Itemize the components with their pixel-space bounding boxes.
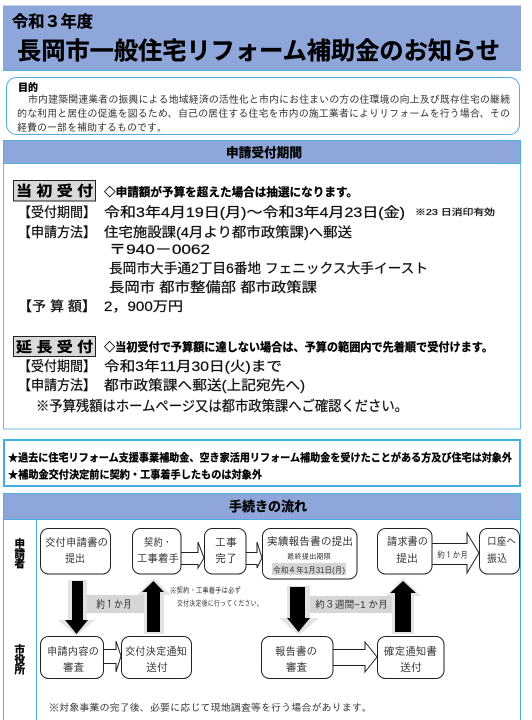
extended acceptance block: 【受付期間】 <box>18 359 96 374</box>
note: contract timing: ※契約・工事着手は必ず <box>170 586 241 595</box>
box: construction complete: 工事 <box>215 537 237 549</box>
extended acceptance block: ※予算残額はホームページ又は都市政策課へご確認ください。 <box>36 398 408 414</box>
initial acceptance block: ◇申請額が予算を超えた場合は抽選になります。 <box>104 185 358 199</box>
arrow: up to contract <box>137 578 171 634</box>
box: report review: 報告書の <box>275 646 317 658</box>
arrow: invoice to transfer <box>432 533 479 573</box>
initial acceptance block: 【申請方法】 <box>18 225 96 240</box>
extended acceptance label <box>14 336 96 356</box>
box: construction complete <box>204 528 246 574</box>
box: contract and construction start: 工事着手 <box>137 552 179 565</box>
box: performance report submission <box>262 528 357 579</box>
purpose body text: 市内建築関連業者の振興による地域経済の活性化と市内にお住まいの方の住環境の向上及び既存住宅の継続 <box>28 93 510 106</box>
row label: city hall: 役 <box>14 653 26 666</box>
arrow: report review to final notice <box>333 642 377 672</box>
extended acceptance block: ◇当初受付で予算額に達しない場合は、予算の範囲内で先着順で受付けます。 <box>104 340 493 354</box>
row label: applicant: 者 <box>14 557 25 570</box>
box: application review: 審査 <box>63 662 84 674</box>
duration label: about one month <box>87 595 144 613</box>
title banner <box>3 6 521 70</box>
panel: eligibility notice: ★過去に住宅リフォーム支援事業補助金、空き家活用リフォーム補助金を受けたことがある方及び住宅は対象外 <box>8 451 512 464</box>
initial acceptance label: 当 初 受 付 <box>16 183 93 199</box>
box: bank transfer: 口座へ <box>487 536 516 548</box>
initial acceptance block: 令和3年4月19日(月)～令和3年4月23日(金) <box>104 205 405 220</box>
application period heading band <box>4 140 520 164</box>
panel: procedure flow <box>4 494 520 720</box>
row label: applicant: 申 <box>14 537 25 550</box>
box: performance report submission: 最終提出期限 <box>287 552 331 561</box>
arrow: down, about one month <box>58 580 95 636</box>
box: contract and construction start: 契約・ <box>144 537 172 549</box>
initial acceptance block: 【受付期間】 <box>18 205 96 220</box>
box: final notice <box>378 636 444 678</box>
box: grant application submission <box>40 528 110 574</box>
purpose body text: 的な利用と居住の促進を図るため、自己の居住する住宅を市内の施工業者によりリフォームを行う場合、その <box>17 107 510 120</box>
main title: 長岡市一般住宅リフォーム補助金のお知らせ <box>17 38 500 65</box>
initial acceptance block: ※23 日消印有効 <box>415 207 495 217</box>
row label: applicant <box>14 537 26 570</box>
application period heading band: 申請受付期間 <box>226 145 302 160</box>
box: contract and construction start <box>132 528 181 574</box>
row label: city hall: 市 <box>14 643 26 656</box>
box: construction complete: 完了 <box>215 553 237 565</box>
duration label: about one month: 約１か月 <box>96 599 132 611</box>
fiscal year label: 令和３年度 <box>12 12 93 31</box>
box: invoice submission: 請求書の <box>387 536 428 548</box>
initial acceptance block: 〒940－0062 <box>109 242 210 257</box>
footnote: site inspection: ※対象事業の完了後、必要に応じて現地調査等を行う場合があります。 <box>49 702 372 714</box>
box: bank transfer <box>480 528 520 574</box>
box: bank transfer: 振込 <box>487 552 507 565</box>
box: application review: 申請内容の <box>47 646 99 658</box>
arrow: completion to report <box>246 542 262 568</box>
duration label: three weeks to one month: 約３週間~1 か月 <box>315 599 388 611</box>
box: report review: 審査 <box>286 662 307 674</box>
deadline date: 令和４年1月31日(月) <box>273 565 345 575</box>
box: application review <box>40 636 104 678</box>
box: invoice submission <box>378 528 432 574</box>
procedure heading band: 手続きの流れ <box>229 499 307 514</box>
box: invoice submission: 提出 <box>396 553 418 565</box>
box: grant application submission: 交付申請書の <box>45 536 108 549</box>
note: contract timing: 交付決定後に行ってください。 <box>177 599 263 608</box>
panel: eligibility notice <box>4 440 520 486</box>
extended acceptance block: 都市政策課へ郵送(上記宛先へ) <box>104 377 305 393</box>
box: grant application submission: 提出 <box>65 553 85 565</box>
initial acceptance block: 2，900万円 <box>104 299 183 314</box>
note: contract timing <box>170 586 263 608</box>
procedure heading band <box>4 494 520 520</box>
box: final notice: 確定通知書 <box>384 645 437 658</box>
initial acceptance block <box>14 180 495 314</box>
initial acceptance block: 【予 算 額】 <box>18 299 96 314</box>
row label: city hall <box>14 643 26 676</box>
initial acceptance block: 住宅施設課(4月より都市政策課)へ郵送 <box>104 224 353 240</box>
panel: application period <box>4 140 520 429</box>
initial acceptance block: 長岡市 都市整備部 都市政策課 <box>109 279 318 295</box>
extended acceptance block: 【申請方法】 <box>18 378 96 393</box>
box: final notice: 送付 <box>400 661 422 674</box>
arrow: review to decision notice <box>103 641 121 672</box>
box: grant decision notice: 送付 <box>146 661 168 674</box>
box: performance report submission: 実績報告書の提出 <box>267 535 353 548</box>
extended acceptance label: 延 長 受 付 <box>16 339 93 355</box>
row label: city hall: 所 <box>14 663 26 676</box>
duration label: invoice to transfer: 約１か月 <box>437 550 468 560</box>
box: grant decision notice <box>122 636 192 678</box>
initial acceptance label <box>14 180 96 201</box>
arrow: down to report review <box>279 586 319 635</box>
purpose body text <box>17 93 510 134</box>
panel: purpose <box>6 78 520 134</box>
box: report review <box>262 636 333 678</box>
purpose heading: 目的 <box>18 81 38 94</box>
extended acceptance block: 令和3年11月30日(火)まで <box>104 359 282 374</box>
box: grant decision notice: 交付決定通知 <box>125 645 187 658</box>
purpose body text: 経費の一部を補助するものです。 <box>17 121 167 134</box>
initial acceptance block: 長岡市大手通2丁目6番地 フェニックス大手イースト <box>109 261 428 276</box>
extended acceptance block <box>14 336 493 414</box>
arrow: contract to completion <box>181 542 204 568</box>
row label: applicant: 請 <box>14 547 26 560</box>
arrow: up to invoice <box>386 578 421 634</box>
duration label: three weeks to one month <box>310 596 393 613</box>
panel: eligibility notice: ★補助金交付決定前に契約・工事着手したものは対象外 <box>8 468 262 481</box>
